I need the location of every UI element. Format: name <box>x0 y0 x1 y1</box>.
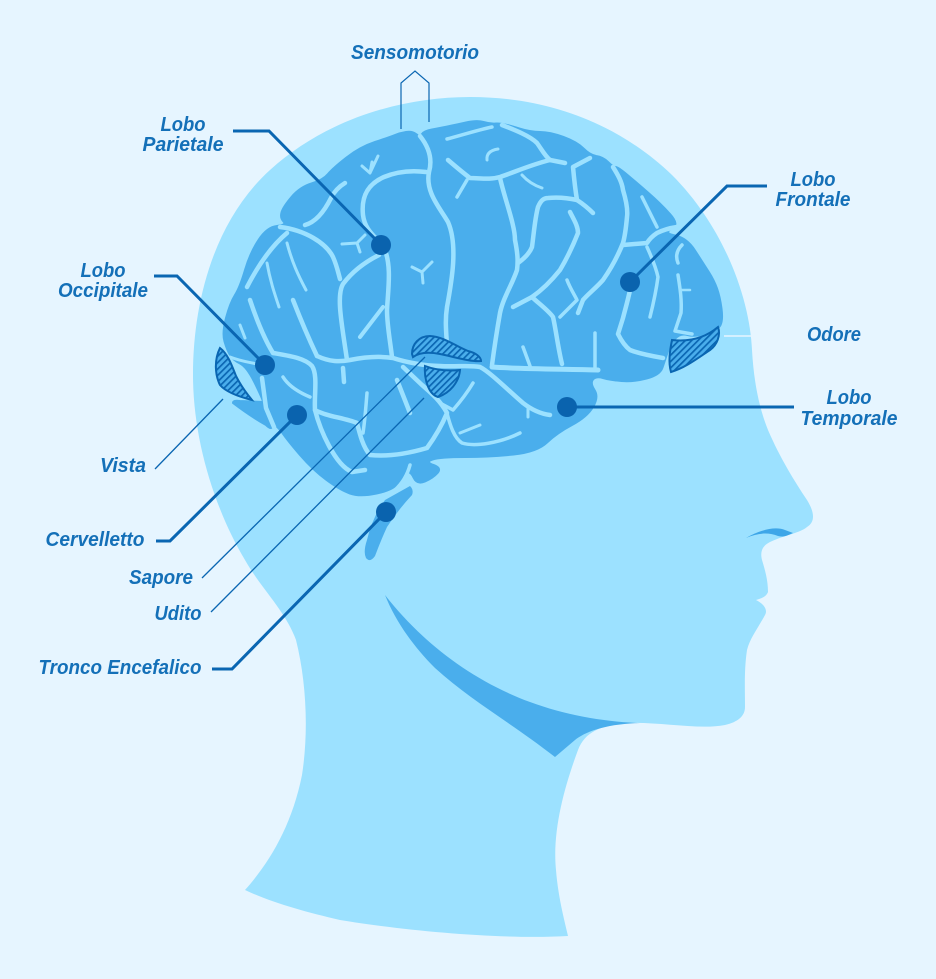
label: lobo occipitale: Lobo <box>80 260 126 282</box>
label: vista: Vista <box>100 455 146 477</box>
label: lobo frontale: Frontale <box>776 189 850 211</box>
marker dots <box>255 235 640 522</box>
connector: cervelletto <box>156 415 297 541</box>
hatched area: sapore <box>412 336 481 361</box>
hatched area: odore <box>669 327 719 372</box>
label: lobo frontale <box>776 169 850 211</box>
nostril shadow <box>746 528 793 538</box>
label: lobo temporale: Lobo <box>826 387 872 409</box>
hatched area: udito <box>425 366 460 397</box>
brain stem <box>365 486 413 560</box>
connector: tronco encefalico <box>212 512 386 669</box>
label: cervelletto: Cervelletto <box>46 529 144 551</box>
connector: odore <box>724 335 760 337</box>
label: lobo occipitale <box>58 260 148 302</box>
brain <box>224 121 722 560</box>
label: lobo parietale <box>142 114 224 156</box>
brain mass <box>224 121 722 495</box>
connector: lobo parietale <box>233 131 381 245</box>
label: lobo parietale: Parietale <box>142 134 224 156</box>
head silhouette <box>193 97 813 937</box>
connector: lobo occipitale <box>154 276 265 365</box>
label: tronco encefalico: Tronco Encefalico <box>38 657 202 679</box>
label: odore: Odore <box>807 324 861 346</box>
label: sapore: Sapore <box>129 567 193 589</box>
label: lobo parietale: Lobo <box>160 114 206 136</box>
connector: sensomotorio bracket <box>401 71 429 129</box>
connector: vista <box>155 399 223 469</box>
jaw shadow <box>385 595 640 757</box>
label: lobo frontale: Lobo <box>790 169 836 191</box>
hatched area: vista <box>216 348 252 400</box>
label: udito: Udito <box>154 603 202 625</box>
connector: lobo temporale <box>567 406 794 408</box>
label: lobo temporale: Temporale <box>800 408 898 430</box>
label: lobo temporale <box>800 387 898 430</box>
connector: sapore <box>202 357 425 578</box>
connector: udito <box>211 398 424 612</box>
brain folds <box>230 125 692 490</box>
label: sensomotorio: Sensomotorio <box>351 42 479 64</box>
connector: lobo frontale <box>630 186 767 282</box>
label: lobo occipitale: Occipitale <box>58 280 148 302</box>
